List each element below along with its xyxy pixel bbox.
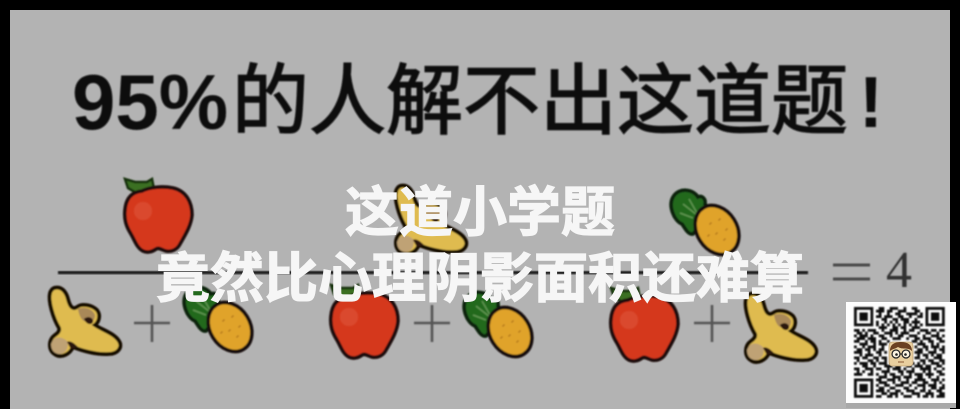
fraction bar: [58, 271, 808, 274]
icon: pineapple numerator: [671, 190, 748, 263]
equals four: [833, 242, 912, 299]
icon: banana denominator left: [50, 288, 120, 356]
plus sign right: [694, 305, 730, 342]
icon: pineapple denominator middle: [464, 292, 541, 365]
title: 95% of people can't solve this: 95%: [72, 58, 228, 146]
icon: apple denominator middle: [331, 285, 398, 358]
icon: banana denominator right: [746, 294, 816, 362]
overlay caption: white headline: 这道小学题: [345, 183, 615, 243]
plus sign left: [134, 305, 170, 342]
title: 95% of people can't solve this: 的人解不出这道题: [232, 59, 848, 145]
overlay caption: white headline: [156, 183, 804, 309]
icon: glasses face avatar: [889, 342, 913, 366]
equals four: 4: [886, 242, 912, 299]
plus sign middle: [414, 305, 450, 342]
overlay caption: white headline: 竟然比心理阴影面积还难算: [156, 249, 804, 309]
icon: pineapple denominator left: [184, 287, 261, 360]
title: 95% of people can't solve this: !: [859, 63, 883, 143]
icon: banana numerator: [396, 186, 466, 254]
icon: apple denominator right: [611, 288, 678, 361]
QR code card: [846, 302, 956, 408]
icon: apple numerator: [125, 179, 192, 252]
